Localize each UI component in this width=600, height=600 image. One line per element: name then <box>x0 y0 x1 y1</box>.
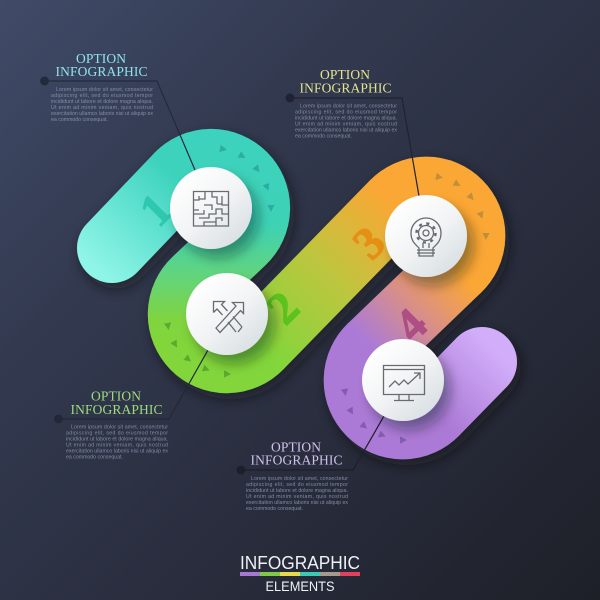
text block 2 <box>66 388 168 461</box>
footer subtitle: ELEMENTS <box>266 578 334 594</box>
body 2: ea commodo consequat. <box>66 455 123 461</box>
heading 3: INFOGRAPHIC <box>300 80 392 96</box>
leader line 1 <box>40 76 195 170</box>
leader line 3 <box>286 94 419 196</box>
heading 1: OPTION <box>76 51 126 66</box>
body 4: incididunt ut labore et dolore magna aliqua. <box>246 488 348 494</box>
body 1: Lorem ipsum dolor sit amet, consectetur <box>56 87 153 93</box>
triangles on purple arc <box>341 388 407 444</box>
body 3: adipiscing elit, sed do eiusmod tempor <box>295 110 397 116</box>
body 4: ea commodo consequat. <box>246 506 303 512</box>
body 4: adipiscing elit, sed do eiusmod tempor <box>246 482 348 488</box>
footer logo <box>240 552 360 594</box>
text block 4 <box>246 440 348 512</box>
body 4: Lorem ipsum dolor sit amet, consectetur <box>251 476 348 482</box>
white circle 4 with monitor icon <box>362 339 444 421</box>
number 4: 4 <box>384 298 437 351</box>
heading 2: INFOGRAPHIC <box>70 402 162 417</box>
body 4: exercitation ullamco laboris nisi ut aliquip ex <box>246 500 348 506</box>
body 3: Lorem ipsum dolor sit amet, consectetur <box>300 104 397 110</box>
segment 4 end cap <box>434 362 482 411</box>
leader line 2 <box>54 350 208 424</box>
text block 3 <box>295 67 397 140</box>
body 1 <box>51 87 153 123</box>
body 4: Ut enim ad minim veniam, quis nostrud <box>246 494 348 500</box>
triangles on green arc <box>164 322 231 378</box>
body 2: Lorem ipsum dolor sit amet, consectetur <box>71 425 168 431</box>
body 2: adipiscing elit, sed do eiusmod tempor <box>66 431 168 437</box>
body 2: exercitation ullamco laboris nisi ut aliquip ex <box>66 449 168 455</box>
body 1: Ut enim ad minim veniam, quis nostrud <box>51 105 153 111</box>
number 2: 2 <box>256 281 309 334</box>
body 3: ea commodo consequat. <box>295 134 352 140</box>
number 1: 1 <box>129 183 182 236</box>
heading 3: OPTION <box>320 67 370 82</box>
white circle 2 with arrows icon <box>186 273 268 355</box>
segment 4 purple <box>359 348 435 424</box>
segment 3 to 4 gradient bar <box>372 268 456 349</box>
heading 4: INFOGRAPHIC <box>250 452 342 468</box>
body 3 <box>295 104 397 140</box>
triangles on teal arc <box>219 145 275 212</box>
triangles on orange arc <box>435 173 490 240</box>
body 3: exercitation ullamco laboris nisi ut aliquip ex <box>295 128 397 134</box>
body 3: Ut enim ad minim veniam, quis nostrud <box>295 122 397 128</box>
flowing ribbon band <box>112 164 482 424</box>
icon: bulb with gear <box>411 218 441 256</box>
segment 1 light teal tail <box>112 177 180 248</box>
icon: monitor with chart <box>384 366 424 400</box>
colour bar <box>240 572 360 576</box>
text block 1 <box>51 51 153 123</box>
body 4 <box>246 476 348 512</box>
body 2 <box>66 425 168 461</box>
body 1: ea commodo consequat. <box>51 117 108 123</box>
segments 1 and 2 teal to green <box>179 164 259 358</box>
white circle 1 with maze icon <box>170 167 252 249</box>
number 3: 3 <box>342 216 395 269</box>
body 2: incididunt ut labore et dolore magna aliqua. <box>66 437 168 443</box>
heading 2: OPTION <box>91 388 141 404</box>
body 2: Ut enim ad minim veniam, quis nostrud <box>66 443 168 449</box>
body 1: incididunt ut labore et dolore magna aliqua. <box>51 99 153 105</box>
icon: maze <box>194 192 228 226</box>
segment 2 to 3 gradient bar <box>258 205 395 345</box>
footer title: INFOGRAPHIC <box>240 552 360 573</box>
segment 3 orange <box>394 192 470 268</box>
heading 4: OPTION <box>271 440 321 454</box>
body 1: adipiscing elit, sed do eiusmod tempor <box>51 93 153 99</box>
body 1: exercitation ullamco laboris nisi ut aliquip ex <box>51 111 153 117</box>
body 3: incididunt ut labore et dolore magna aliqua. <box>295 116 397 122</box>
white circle 3 with bulb icon <box>385 195 467 277</box>
icon: crossing arrows <box>214 302 244 332</box>
heading 1: INFOGRAPHIC <box>56 64 148 79</box>
leader line 4 <box>236 416 384 474</box>
